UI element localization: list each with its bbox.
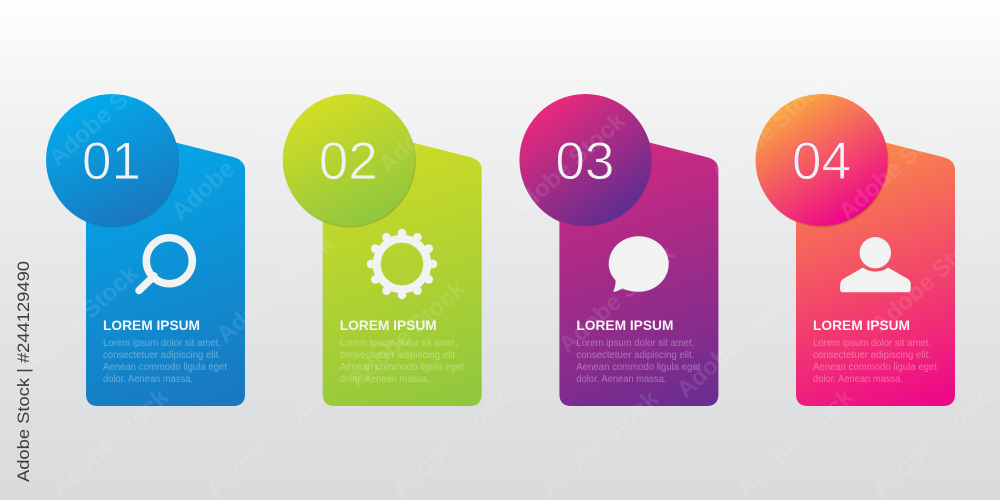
body text 01: consectetuer adipiscing elit. (103, 349, 221, 361)
body text 03: consectetuer adipiscing elit. (576, 349, 694, 361)
panel: card 01 body (86, 136, 245, 406)
heading 04: LOREM IPSUM (813, 317, 910, 333)
watermark pattern: Adobe Stock (731, 383, 859, 500)
icon: gear (367, 229, 437, 299)
watermark pattern: Adobe Stock (343, 275, 471, 394)
side credit text: Adobe Stock | #244129490 (14, 261, 33, 482)
panel: card 03 body (559, 136, 718, 406)
card 04 (756, 94, 955, 406)
number circle 03 (519, 94, 651, 226)
panel: card 02 body (323, 136, 482, 406)
watermark pattern: Adobe Stock (833, 107, 961, 226)
body text 04: consectetuer adipiscing elit. (813, 349, 931, 361)
body text 01: Lorem ipsum dolor sit amet, (103, 337, 221, 349)
watermark pattern: Adobe Stock (866, 220, 994, 339)
watermark pattern: Adobe Stock (706, 70, 834, 189)
watermark pattern: Adobe Stock (43, 53, 171, 172)
number circle shadow 02 (284, 96, 416, 228)
card 02 (283, 94, 482, 406)
number circle 01 (46, 94, 178, 226)
body text 03: dolor. Aenean massa. (576, 373, 666, 385)
icon: person (840, 237, 911, 292)
heading 01: LOREM IPSUM (103, 317, 200, 333)
number circle shadow 03 (520, 96, 652, 228)
number circle shadow 01 (47, 96, 179, 228)
heading 03: LOREM IPSUM (576, 317, 673, 333)
body text 02: dolor. Aenean massa. (340, 373, 430, 385)
icon: magnifying glass (139, 238, 192, 290)
body text 04: Lorem ipsum dolor sit amet, (813, 337, 931, 349)
card 03 (519, 94, 718, 406)
number 01: 01 (82, 132, 141, 191)
watermark pattern: Adobe Stock (211, 230, 339, 349)
watermark pattern: Adobe Stock (16, 260, 144, 379)
number circle shadow 04 (756, 96, 888, 228)
watermark pattern: Adobe Stock (671, 285, 799, 404)
watermark pattern: Adobe Stock (386, 385, 514, 500)
body text 02: Lorem ipsum dolor sit amet, (340, 337, 458, 349)
watermark pattern: Adobe Stock (866, 385, 994, 500)
number 04: 04 (792, 132, 851, 191)
body text 02 (340, 337, 464, 385)
number 03: 03 (555, 132, 614, 191)
watermark pattern: Adobe Stock (373, 60, 501, 179)
body text 04: Aenean commodo ligula eget (813, 361, 937, 373)
number circle 02 (283, 94, 415, 226)
body text 03: Aenean commodo ligula eget (576, 361, 700, 373)
watermark pattern: Adobe Stock (166, 107, 294, 226)
body text 01: dolor. Aenean massa. (103, 373, 193, 385)
watermark pattern: Adobe Stock (46, 383, 174, 500)
heading 02: LOREM IPSUM (340, 317, 437, 333)
icon: speech bubble (609, 236, 669, 292)
body text 01 (103, 337, 227, 385)
watermark pattern: Adobe Stock (503, 107, 631, 226)
body text 04 (813, 337, 937, 385)
panel: card 04 body (796, 136, 955, 406)
body text 03: Lorem ipsum dolor sit amet, (576, 337, 694, 349)
watermark pattern: Adobe Stock (201, 385, 329, 500)
watermark pattern: Adobe Stock (553, 240, 681, 359)
body text 02: Aenean commodo ligula eget (340, 361, 464, 373)
body text 01: Aenean commodo ligula eget (103, 361, 227, 373)
body text 03 (576, 337, 700, 385)
card 01 (46, 94, 245, 406)
number 02: 02 (319, 132, 378, 191)
watermark pattern: Adobe Stock (536, 385, 664, 500)
body text 04: dolor. Aenean massa. (813, 373, 903, 385)
number circle 04 (756, 94, 888, 226)
body text 02: consectetuer adipiscing elit. (340, 349, 458, 361)
